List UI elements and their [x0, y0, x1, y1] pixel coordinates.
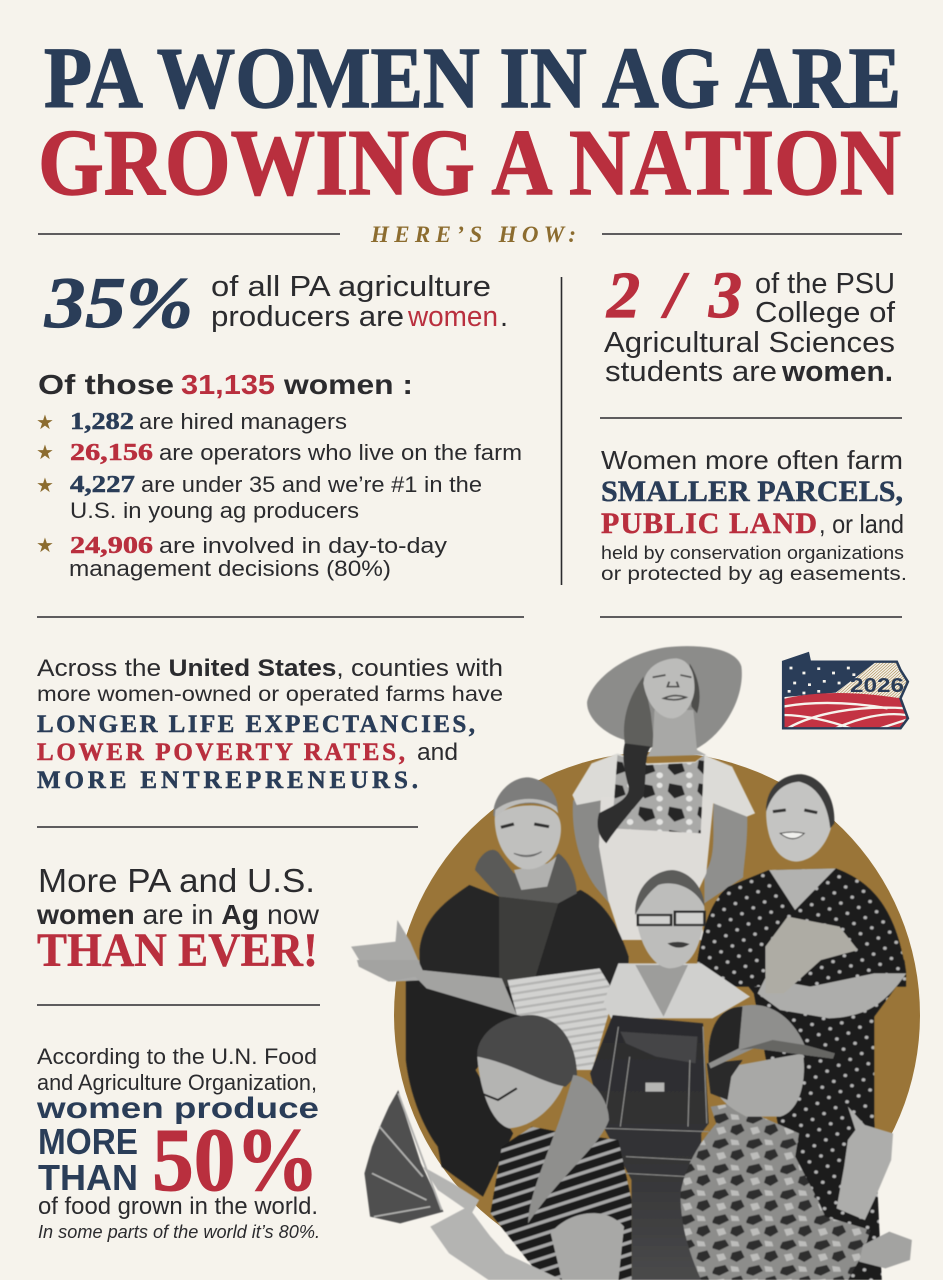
stat: 35 percent of producers: women [407, 301, 498, 333]
text block: UN food statistic: of food grown in the world. [38, 1193, 318, 1220]
text block: smaller parcels: , or land [819, 509, 904, 539]
text block: across the United States: more women-owned or operated farms have [37, 683, 503, 706]
list item: under 35: ★ [36, 473, 54, 497]
list item: operators: 26,156 [70, 440, 153, 466]
list heading [38, 369, 413, 400]
list heading: 31,135 [181, 369, 275, 400]
person: woman in overalls with outstretched arm [351, 870, 750, 1280]
list heading: women : [283, 369, 413, 400]
list item: operators: ★ [36, 440, 54, 464]
stat: two thirds of students: women. [781, 356, 893, 388]
text block: smaller parcels: SMALLER PARCELS, [601, 475, 903, 508]
subheading: here's how: HERE’S HOW: [370, 222, 576, 247]
icon: 2026 Pennsylvania badge [780, 650, 910, 730]
stat: two thirds of students: of the PSU [755, 268, 895, 300]
list item: day-to-day decisions: management decisions (80%) [69, 556, 391, 581]
list item: under 35 [36, 472, 482, 523]
stat: two thirds of students: Agricultural Sciences [604, 327, 895, 359]
person: woman in cap and hoodie [406, 777, 629, 1197]
stat: two thirds of students [604, 259, 896, 388]
list item: hired managers: ★ [36, 410, 54, 434]
text block: UN food statistic: In some parts of the world it’s 80%. [38, 1222, 320, 1242]
stat: 35 percent of producers: . [500, 301, 508, 333]
list item: under 35: U.S. in young ag producers [70, 498, 359, 523]
list item: operators: are operators who live on the farm [159, 440, 522, 465]
list item: under 35: 4,227 [70, 472, 135, 498]
stat: 35 percent of producers: of all PA agriculture [211, 271, 491, 303]
stat: 35 percent of producers: producers are [211, 301, 404, 333]
text block: UN food statistic: women produce [36, 1092, 319, 1125]
text block: across the United States: LONGER LIFE EXPECTANCIES, [37, 711, 475, 738]
text block: across the United States [37, 655, 503, 794]
stat: two thirds of students: students are [605, 356, 777, 388]
list item: hired managers: are hired managers [139, 409, 347, 434]
stat: two thirds of students: College of [755, 297, 896, 329]
text block: smaller parcels: PUBLIC LAND [601, 507, 817, 540]
text block: smaller parcels: held by conservation organizations [601, 543, 904, 563]
list item: operators [36, 440, 522, 466]
list item: day-to-day decisions: ★ [36, 533, 54, 557]
list item: day-to-day decisions [36, 533, 447, 581]
stat: 35 percent of producers [44, 263, 508, 343]
stat: 35 percent of producers: 35% [44, 263, 193, 343]
text block: smaller parcels [601, 445, 907, 585]
person: woman in cap and camouflage fleece [680, 1005, 912, 1280]
list item: under 35: are under 35 and we’re #1 in the [141, 472, 482, 497]
stat list: of those 31,135 women [36, 369, 522, 581]
text block: UN food statistic: According to the U.N. Food [37, 1044, 317, 1069]
badge year label: 2026 [850, 675, 904, 697]
text block: across the United States: and [417, 739, 458, 766]
text block: UN food statistic: MORE [38, 1121, 138, 1162]
list heading: Of those [38, 369, 174, 400]
photo collage of women farmers [351, 646, 920, 1280]
text block: smaller parcels: Women more often farm [601, 445, 903, 475]
text block: more women than ever: More PA and U.S. [38, 862, 315, 899]
list item: day-to-day decisions: 24,906 [70, 533, 153, 559]
stat: two thirds of students: 2 / 3 [606, 259, 742, 332]
text block: across the United States: MORE ENTREPRENEURS. [37, 767, 418, 794]
text block: UN food statistic: and Agriculture Organization, [37, 1070, 317, 1095]
text block: UN food statistic: 50% [152, 1111, 319, 1210]
list item: hired managers: 1,282 [70, 409, 134, 435]
person: woman with corn bundle in polka-dot dress [695, 774, 906, 1280]
text block: more women than ever: THAN EVER! [37, 924, 318, 977]
title [38, 29, 901, 215]
icon: leaf [364, 1090, 443, 1223]
person: woman in sun hat [572, 646, 755, 940]
text block: across the United States: LOWER POVERTY RATES, [37, 739, 405, 766]
text block: more women than ever [36, 862, 320, 977]
person: woman with ponytail holding leaf [423, 1015, 632, 1280]
text block: more women than ever: women are in Ag now [36, 899, 320, 930]
text block: smaller parcels: or protected by ag easements. [601, 564, 907, 585]
list item: hired managers [36, 409, 347, 435]
text block: across the United States: Across the United States , counties with [37, 655, 503, 682]
text block: UN food statistic [36, 1044, 320, 1242]
text block: UN food statistic: THAN [38, 1157, 138, 1198]
list item: day-to-day decisions: are involved in day-to-day [159, 533, 447, 558]
gold circle [394, 752, 920, 1278]
